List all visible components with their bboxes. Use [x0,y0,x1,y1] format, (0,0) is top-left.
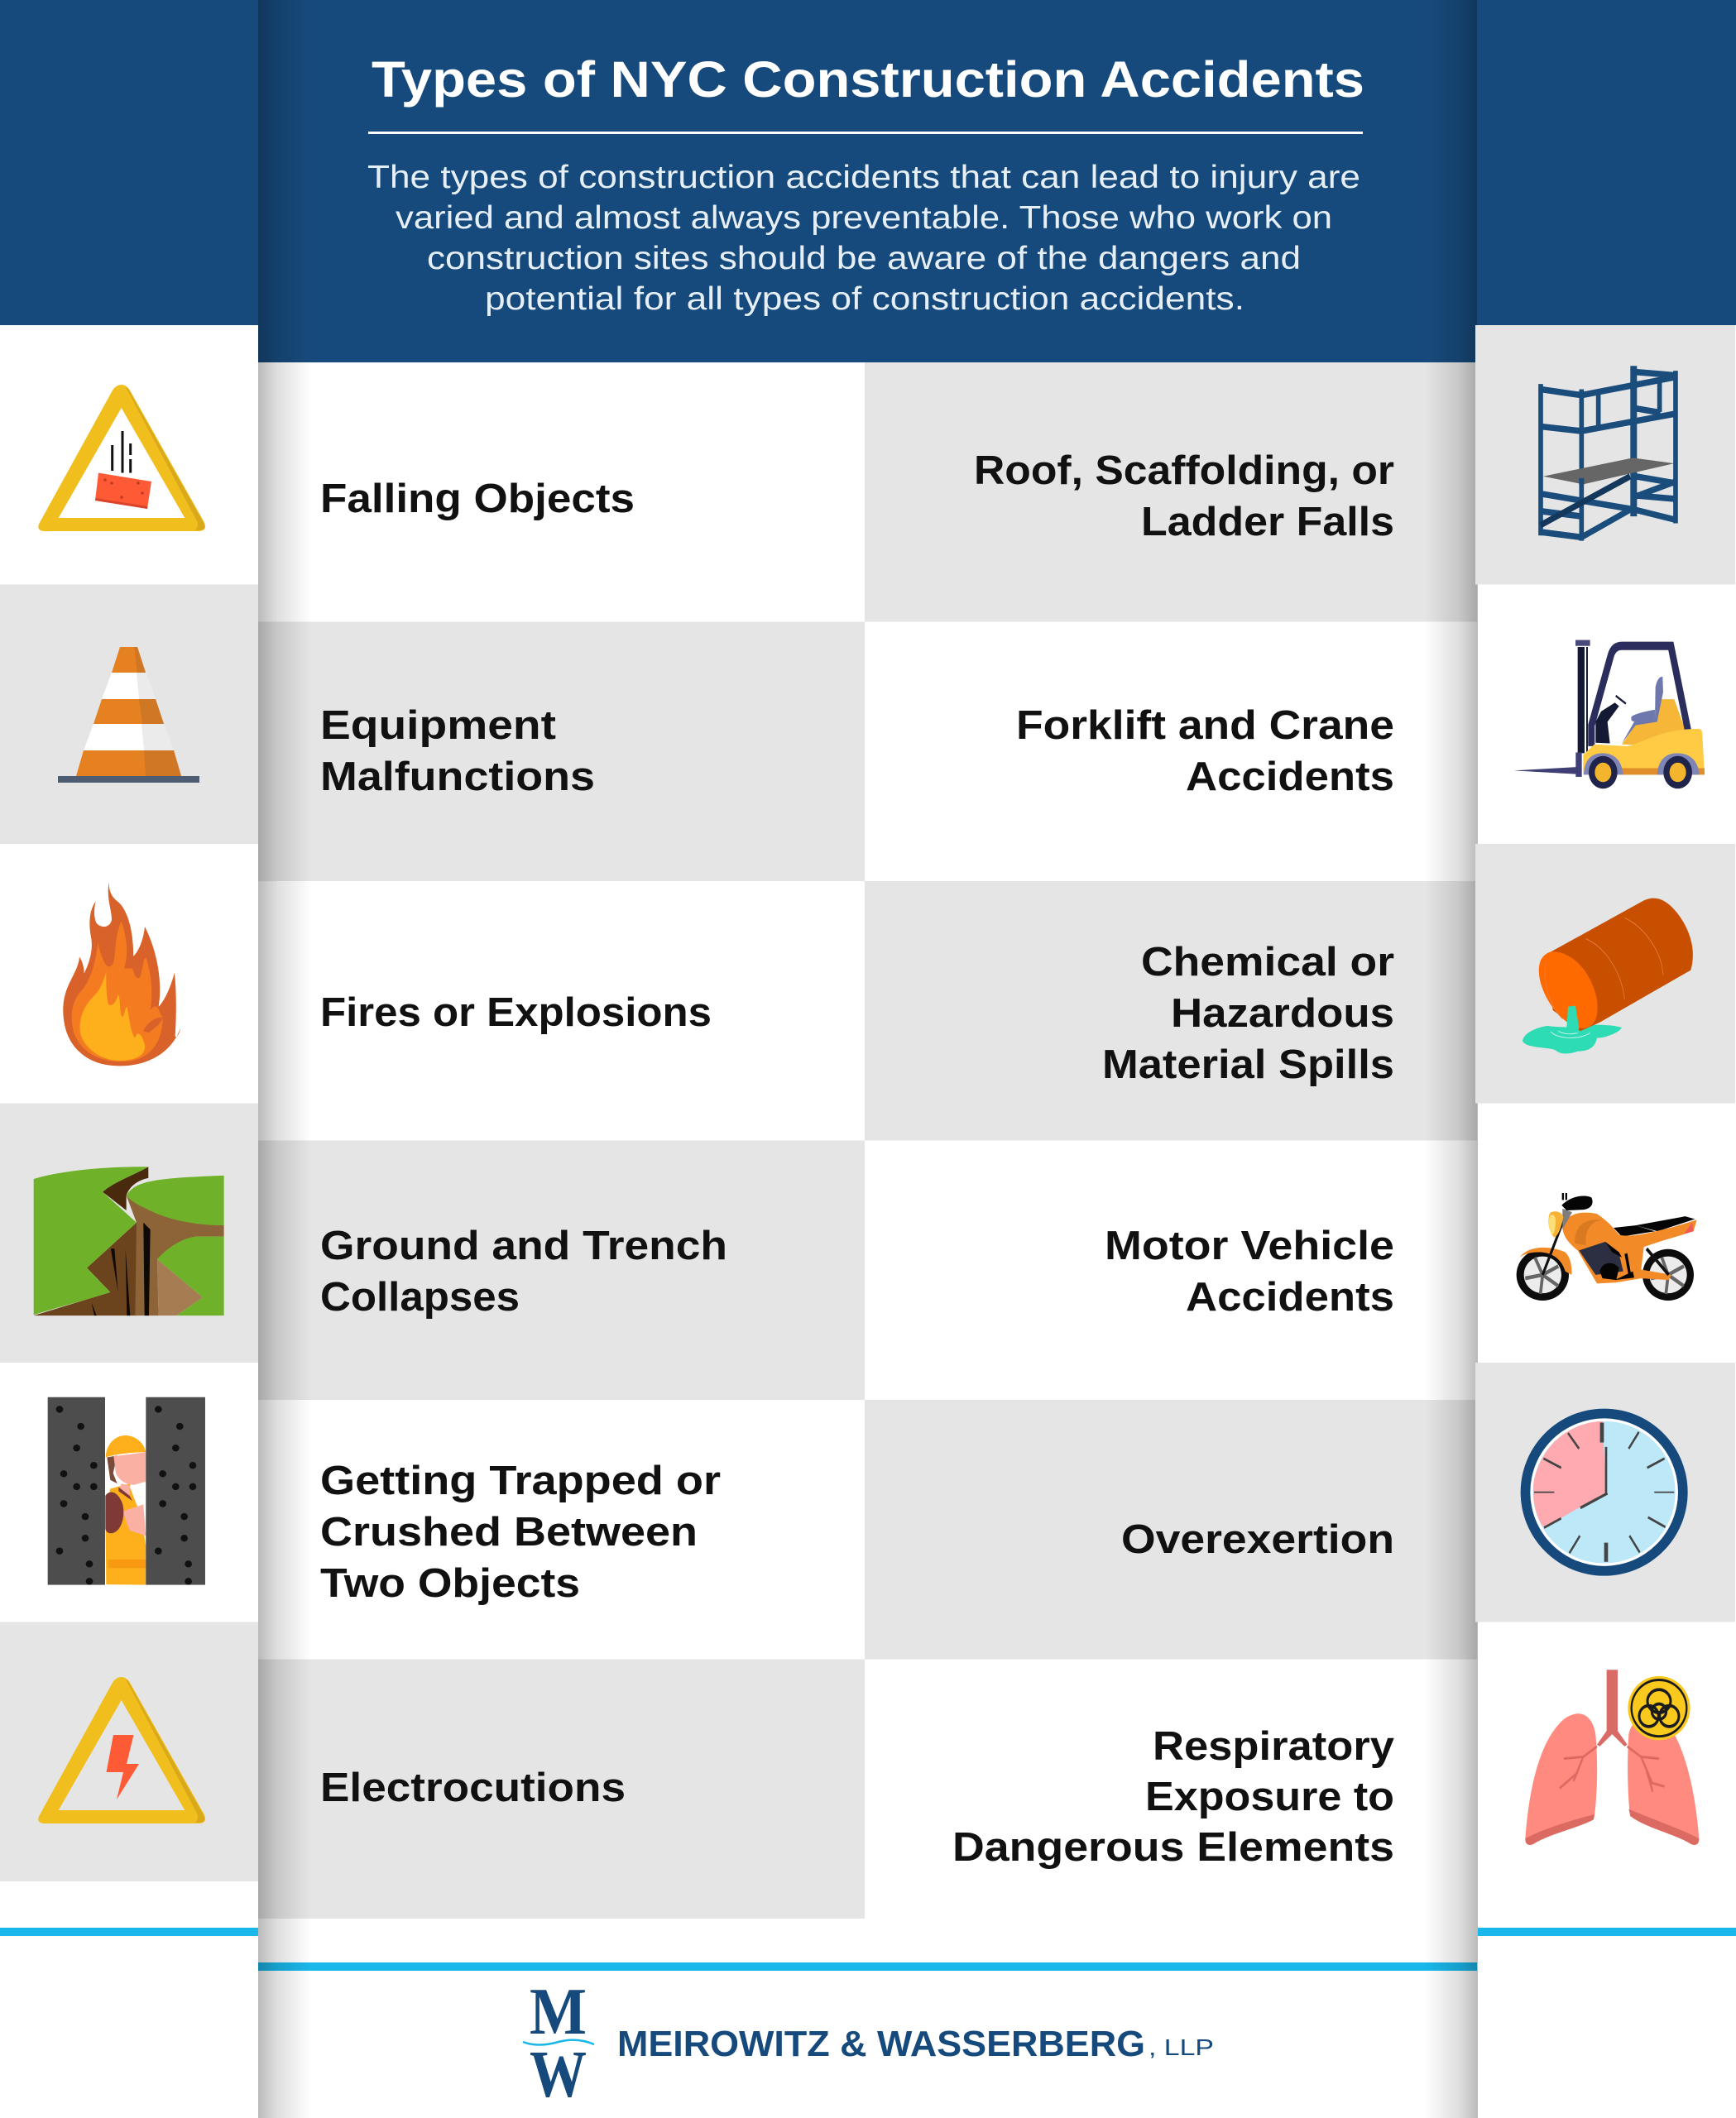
right column labels: Chemical or [1141,940,1394,985]
icon: spilling barrel [1523,898,1693,1054]
icon: worker trapped between walls [48,1397,205,1585]
right column labels: Forklift and Crane [1016,703,1394,748]
left column labels: Getting Trapped or [320,1459,721,1503]
left column labels: Electrocutions [320,1766,626,1810]
intro paragraph: construction sites should be aware of the dangers and [427,241,1301,276]
left column labels: Two Objects [320,1561,580,1606]
right column labels: Roof, Scaffolding, or [974,448,1394,493]
right column labels: Material Spills [1102,1042,1394,1087]
left column labels: Falling Objects [320,477,635,521]
panel: centre column [258,0,1478,2118]
icon: ground collapse [34,1167,224,1315]
icon: motorcycle [1517,1193,1697,1301]
icon: flame [63,882,180,1066]
left column labels: Collapses [320,1275,520,1320]
right column labels: Accidents [1186,755,1394,799]
right column labels: Accidents [1186,1275,1394,1320]
logo mark: M [530,1976,587,2049]
right column labels: Dangerous Elements [952,1825,1394,1870]
panel: left icon column [0,0,258,1936]
icon: lungs with biohazard symbol [1525,1670,1699,1845]
left column labels: Equipment [320,703,556,748]
icon: scaffolding [1541,366,1676,541]
intro paragraph: potential for all types of construction accidents. [485,281,1244,317]
left column labels: Crushed Between [320,1510,698,1555]
icon: electrical warning triangle [39,1678,204,1823]
logo mark: W [530,2039,587,2111]
right column labels: Respiratory [1153,1724,1394,1769]
logo mark [523,1976,594,2111]
intro paragraph: varied and almost always preventable. Those who work on [396,200,1332,236]
logo: MEIROWITZ & WASSERBERG [617,2024,1145,2064]
icon: falling brick warning triangle [39,386,204,530]
logo [523,1976,1214,2111]
left column labels: Fires or Explosions [320,990,712,1035]
right column labels: Ladder Falls [1141,500,1394,544]
title: Types of NYC Construction Accidents [372,51,1364,108]
right column labels [952,448,1394,1870]
intro paragraph: The types of construction accidents that can lead to injury are [367,160,1360,195]
panel: right icon column [1475,0,1736,1936]
table of accident types [258,362,1477,1919]
right column labels: Exposure to [1145,1775,1394,1819]
icon: forklift [1513,640,1705,788]
right column labels: Overexertion [1121,1517,1394,1562]
header band [258,0,1477,362]
icon: traffic cone [58,647,199,783]
icon: clock [1521,1409,1688,1576]
intro paragraph [367,160,1360,317]
right column labels: Motor Vehicle [1105,1224,1394,1268]
left column labels [320,477,727,1810]
logo: , LLP [1149,2034,1214,2060]
right column labels: Hazardous [1171,991,1394,1036]
left column labels: Ground and Trench [320,1224,727,1268]
left column labels: Malfunctions [320,755,595,799]
